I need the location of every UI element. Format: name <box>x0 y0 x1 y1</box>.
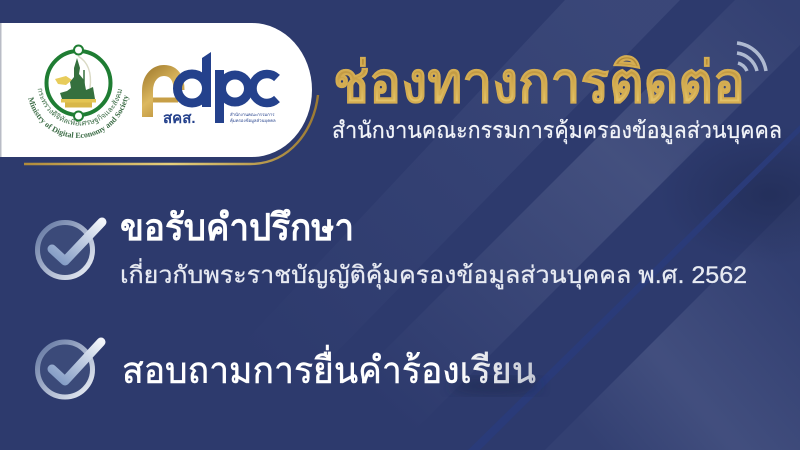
heading 1: ขอรับคำปรึกษา <box>120 207 354 248</box>
gold underline swoosh <box>24 95 318 164</box>
icon: check 2 <box>38 342 101 397</box>
icon: check 1 <box>38 222 102 278</box>
heading 2: สอบถามการยื่นคำร้องเรียน <box>122 344 536 391</box>
ministry emblem: Ministry of Digital Economy and Society <box>28 95 130 138</box>
ministry emblem <box>28 44 130 138</box>
pdpc logo: สคส. <box>163 110 196 127</box>
item 1 <box>38 207 747 290</box>
title: ช่องทางการติดต่อ <box>333 51 745 115</box>
pdpc logo <box>148 52 277 127</box>
ministry emblem: กระทรวงดิจิทัลเพื่อเศรษฐกิจและสังคม <box>38 88 122 126</box>
logo panel <box>0 23 320 166</box>
item 2 <box>38 342 536 397</box>
pdpc logo: คุ้มครองข้อมูลส่วนบุคคล <box>230 118 276 124</box>
icon: signal waves <box>737 43 766 71</box>
description 1: เกี่ยวกับพระราชบัญญัติคุ้มครองข้อมูลส่วนบุคคล พ.ศ. 2562 <box>120 258 747 290</box>
pdpc logo: สำนักงานคณะกรรมการ <box>230 112 275 117</box>
